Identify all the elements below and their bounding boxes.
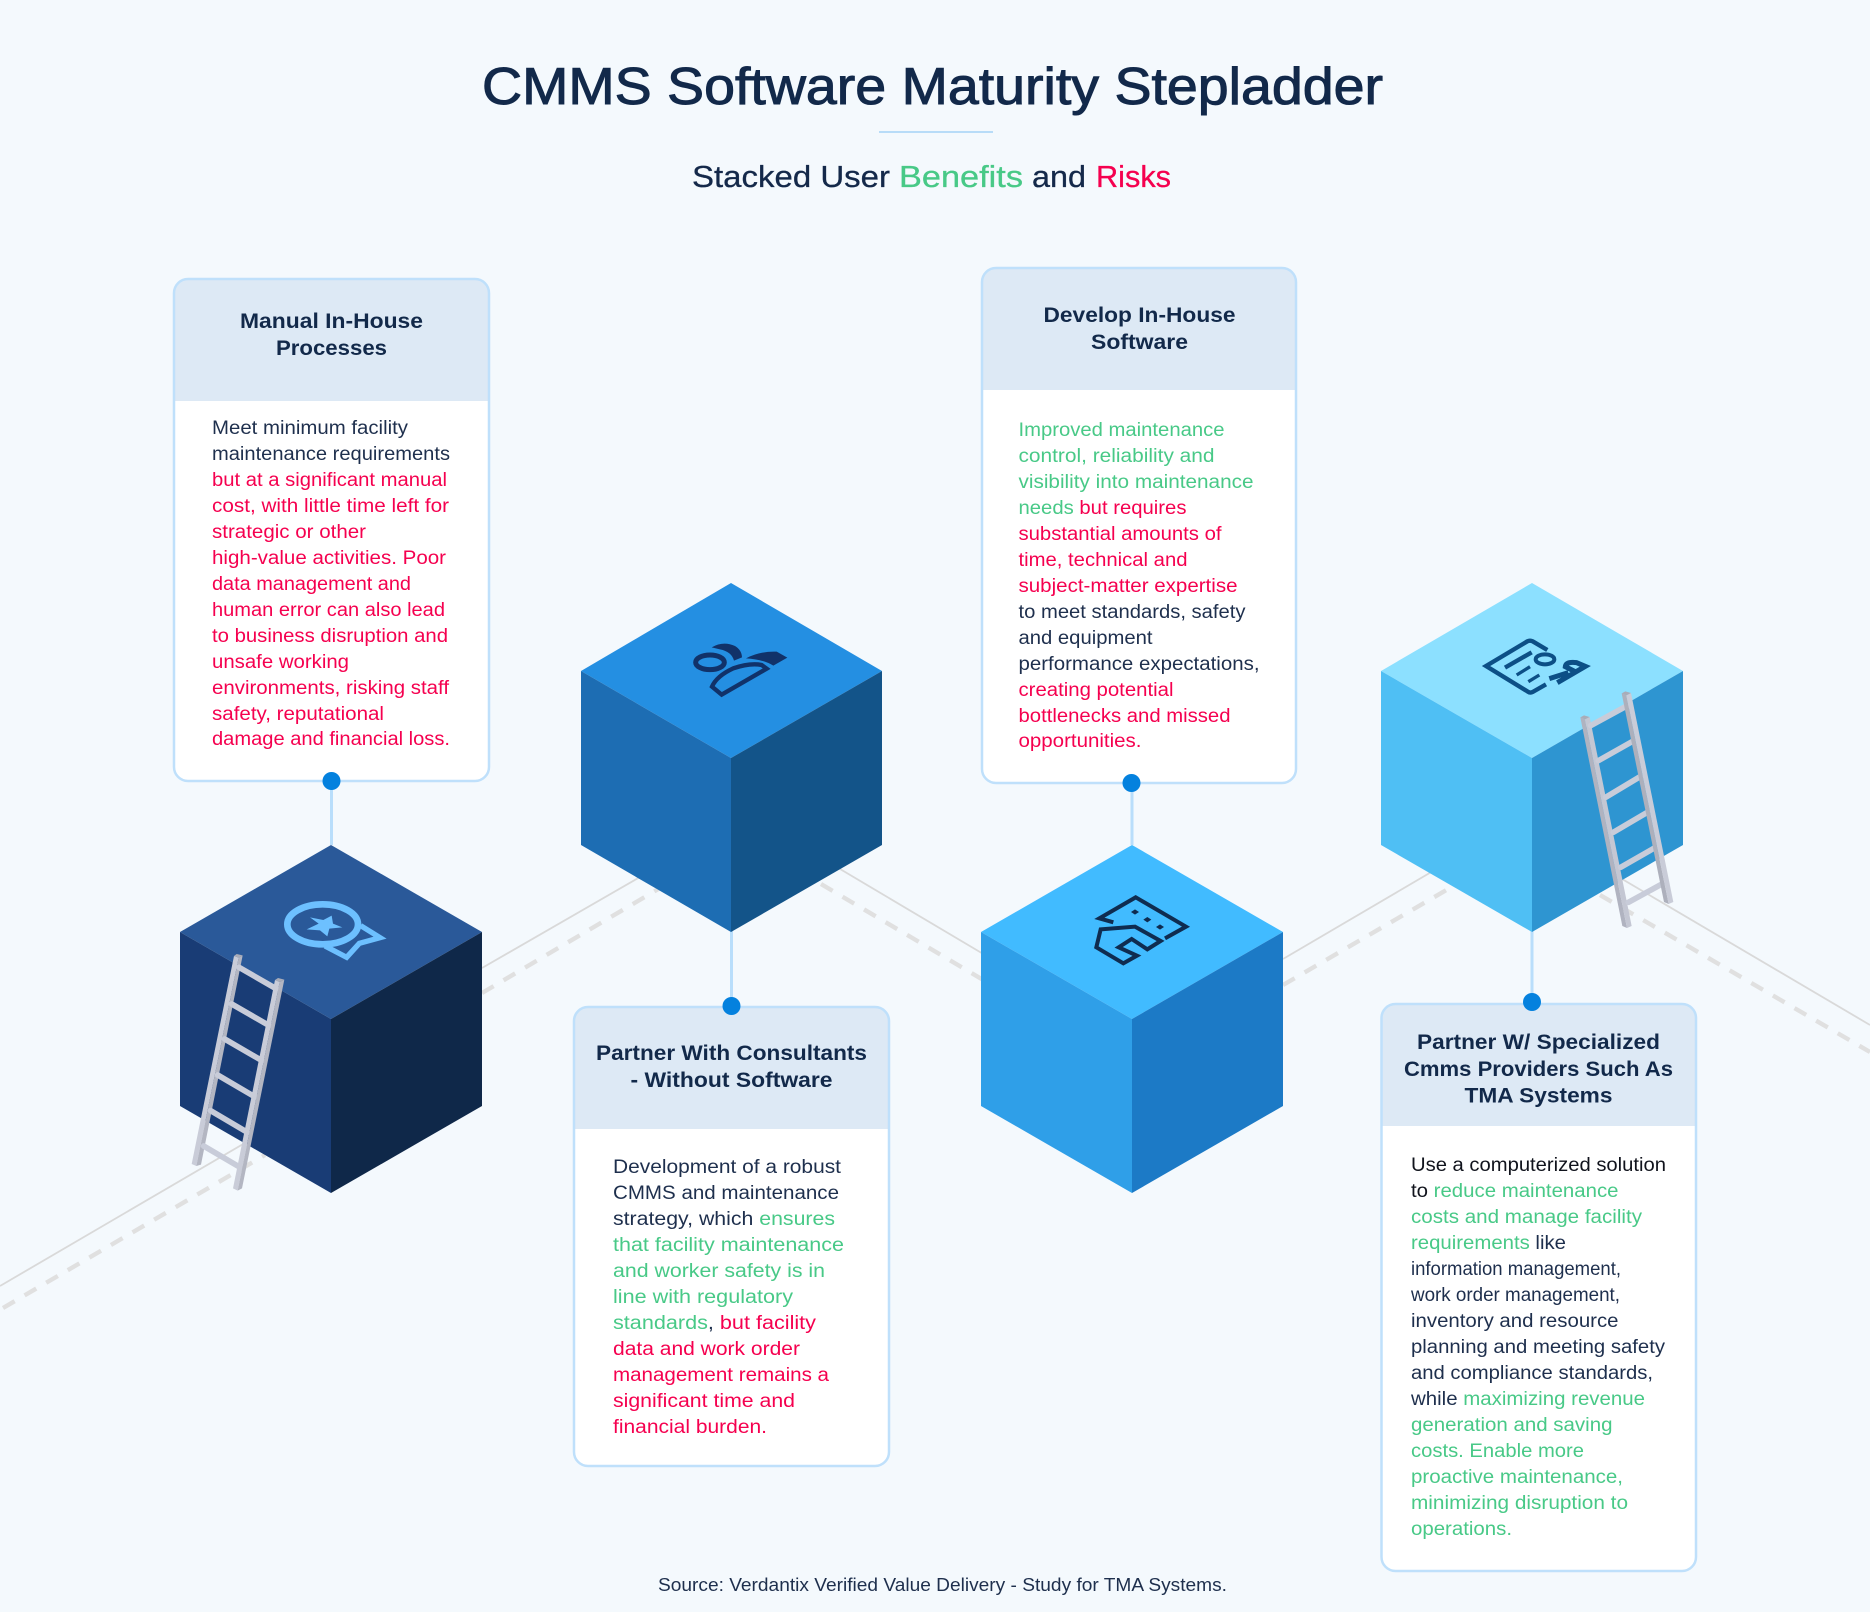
body text <box>613 1157 844 1438</box>
body text: planning and meeting safety <box>1411 1337 1665 1358</box>
panel: Develop In-House Software <box>982 268 1296 792</box>
stepladder path lines <box>0 866 1870 1308</box>
heading <box>1044 303 1236 354</box>
heading: - Without Software <box>630 1068 833 1092</box>
body text: strategy, which ensures <box>613 1209 835 1230</box>
heading: Partner With Consultants <box>596 1041 867 1065</box>
body text: safety, reputational <box>212 704 384 725</box>
source note: Source: Verdantix Verified Value Delivery - Study for TMA Systems. <box>658 1574 1227 1595</box>
body text: bottlenecks and missed <box>1018 706 1230 727</box>
body text: subject-matter expertise <box>1018 576 1238 597</box>
panel: Partner With Consultants <box>574 997 889 1466</box>
body text: Improved maintenance <box>1018 420 1224 441</box>
body text: environments, risking staff <box>212 678 450 699</box>
body text: costs. Enable more <box>1411 1441 1584 1462</box>
ladder: right, on cube 4 <box>1580 691 1673 928</box>
cube 3 <box>981 845 1283 1193</box>
body text: standards , but facility <box>613 1313 816 1334</box>
icon: consultants <box>696 644 787 695</box>
subtitle <box>692 159 1171 194</box>
body text: generation and saving <box>1411 1415 1612 1436</box>
cube 2 <box>581 583 882 932</box>
heading: Software <box>1091 330 1188 354</box>
body text: inventory and resource <box>1411 1311 1618 1332</box>
body text: while maximizing revenue <box>1410 1389 1645 1410</box>
icon: buildings <box>1096 897 1186 963</box>
body text: and equipment <box>1018 628 1153 649</box>
connector: card 3 to cube 3 <box>1130 783 1134 845</box>
connector dot <box>322 772 340 790</box>
body text: and compliance standards, <box>1411 1363 1653 1384</box>
body text: data management and <box>212 574 411 595</box>
connector: cube 2 to card 2 <box>730 931 733 1006</box>
body text: maintenance requirements <box>212 444 450 465</box>
heading: TMA Systems <box>1464 1084 1613 1108</box>
body text: that facility maintenance <box>613 1235 844 1256</box>
body text: to business disruption and <box>212 626 448 647</box>
subtitle: Benefits <box>899 159 1023 194</box>
body text: Use a computerized solution <box>1411 1155 1666 1176</box>
body text <box>1018 420 1260 752</box>
body text: substantial amounts of <box>1018 524 1222 545</box>
subtitle: Stacked User <box>692 159 890 194</box>
body text: Development of a robust <box>613 1157 842 1178</box>
body text: visibility into maintenance <box>1018 472 1254 493</box>
body text: to meet standards, safety <box>1018 602 1246 623</box>
subtitle: Risks <box>1096 159 1171 194</box>
body text: strategic or other <box>212 522 367 543</box>
body text: and worker safety is in <box>613 1261 825 1282</box>
body text: costs and manage facility <box>1411 1207 1642 1228</box>
heading: Cmms Providers Such As <box>1404 1057 1673 1081</box>
connector dot <box>1523 993 1541 1011</box>
body text: control, reliability and <box>1018 446 1214 467</box>
heading <box>596 1041 867 1092</box>
body text: minimizing disruption to <box>1411 1493 1628 1514</box>
body text: needs but requires <box>1018 498 1186 519</box>
body text: time, technical and <box>1018 550 1188 571</box>
icon: medal with star <box>287 904 380 957</box>
ladder: left, on cube 1 <box>192 954 284 1191</box>
cube 4 <box>1381 583 1683 932</box>
connector dot <box>722 997 740 1015</box>
body text: significant time and <box>613 1391 795 1412</box>
body text: cost, with little time left for <box>212 496 450 517</box>
body text: but at a significant manual <box>212 470 447 491</box>
body text: opportunities. <box>1018 731 1142 752</box>
body text <box>1410 1155 1666 1540</box>
body text: damage and financial loss. <box>212 729 450 750</box>
title: CMMS Software Maturity Stepladder <box>482 58 1383 116</box>
body text: to reduce maintenance <box>1411 1181 1618 1202</box>
heading: Manual In-House <box>240 309 423 333</box>
heading: Develop In-House <box>1044 303 1236 327</box>
body text: financial burden. <box>613 1417 767 1438</box>
body text: human error can also lead <box>212 600 445 621</box>
body text: Meet minimum facility <box>212 418 408 439</box>
body text: line with regulatory <box>613 1287 793 1308</box>
panel: Partner W/ Specialized Cmms Providers <box>1382 993 1696 1571</box>
body text: information management, <box>1411 1259 1621 1280</box>
icon: ROI report <box>1486 641 1585 693</box>
body text: work order management, <box>1410 1285 1620 1306</box>
body text <box>212 418 450 750</box>
connector dot <box>1122 774 1140 792</box>
panel: Manual In-House Processes <box>174 279 489 790</box>
heading <box>1404 1030 1673 1108</box>
body text: management remains a <box>613 1365 829 1386</box>
body text: performance expectations, <box>1018 654 1260 675</box>
body text: high-value activities. Poor <box>212 548 447 569</box>
connector: card 1 to cube 1 <box>330 781 333 845</box>
body text: CMMS and maintenance <box>613 1183 839 1204</box>
body text: unsafe working <box>212 652 349 673</box>
cube 1 <box>180 845 482 1193</box>
connector: cube 4 to card 4 <box>1530 931 1534 1002</box>
heading: Partner W/ Specialized <box>1417 1030 1660 1054</box>
body text: operations. <box>1411 1519 1512 1540</box>
subtitle: and <box>1032 159 1086 194</box>
heading <box>240 309 423 360</box>
body text: data and work order <box>613 1339 801 1360</box>
heading: Processes <box>276 336 387 360</box>
body text: proactive maintenance, <box>1411 1467 1623 1488</box>
body text: requirements like <box>1411 1233 1566 1254</box>
body text: creating potential <box>1018 680 1174 701</box>
